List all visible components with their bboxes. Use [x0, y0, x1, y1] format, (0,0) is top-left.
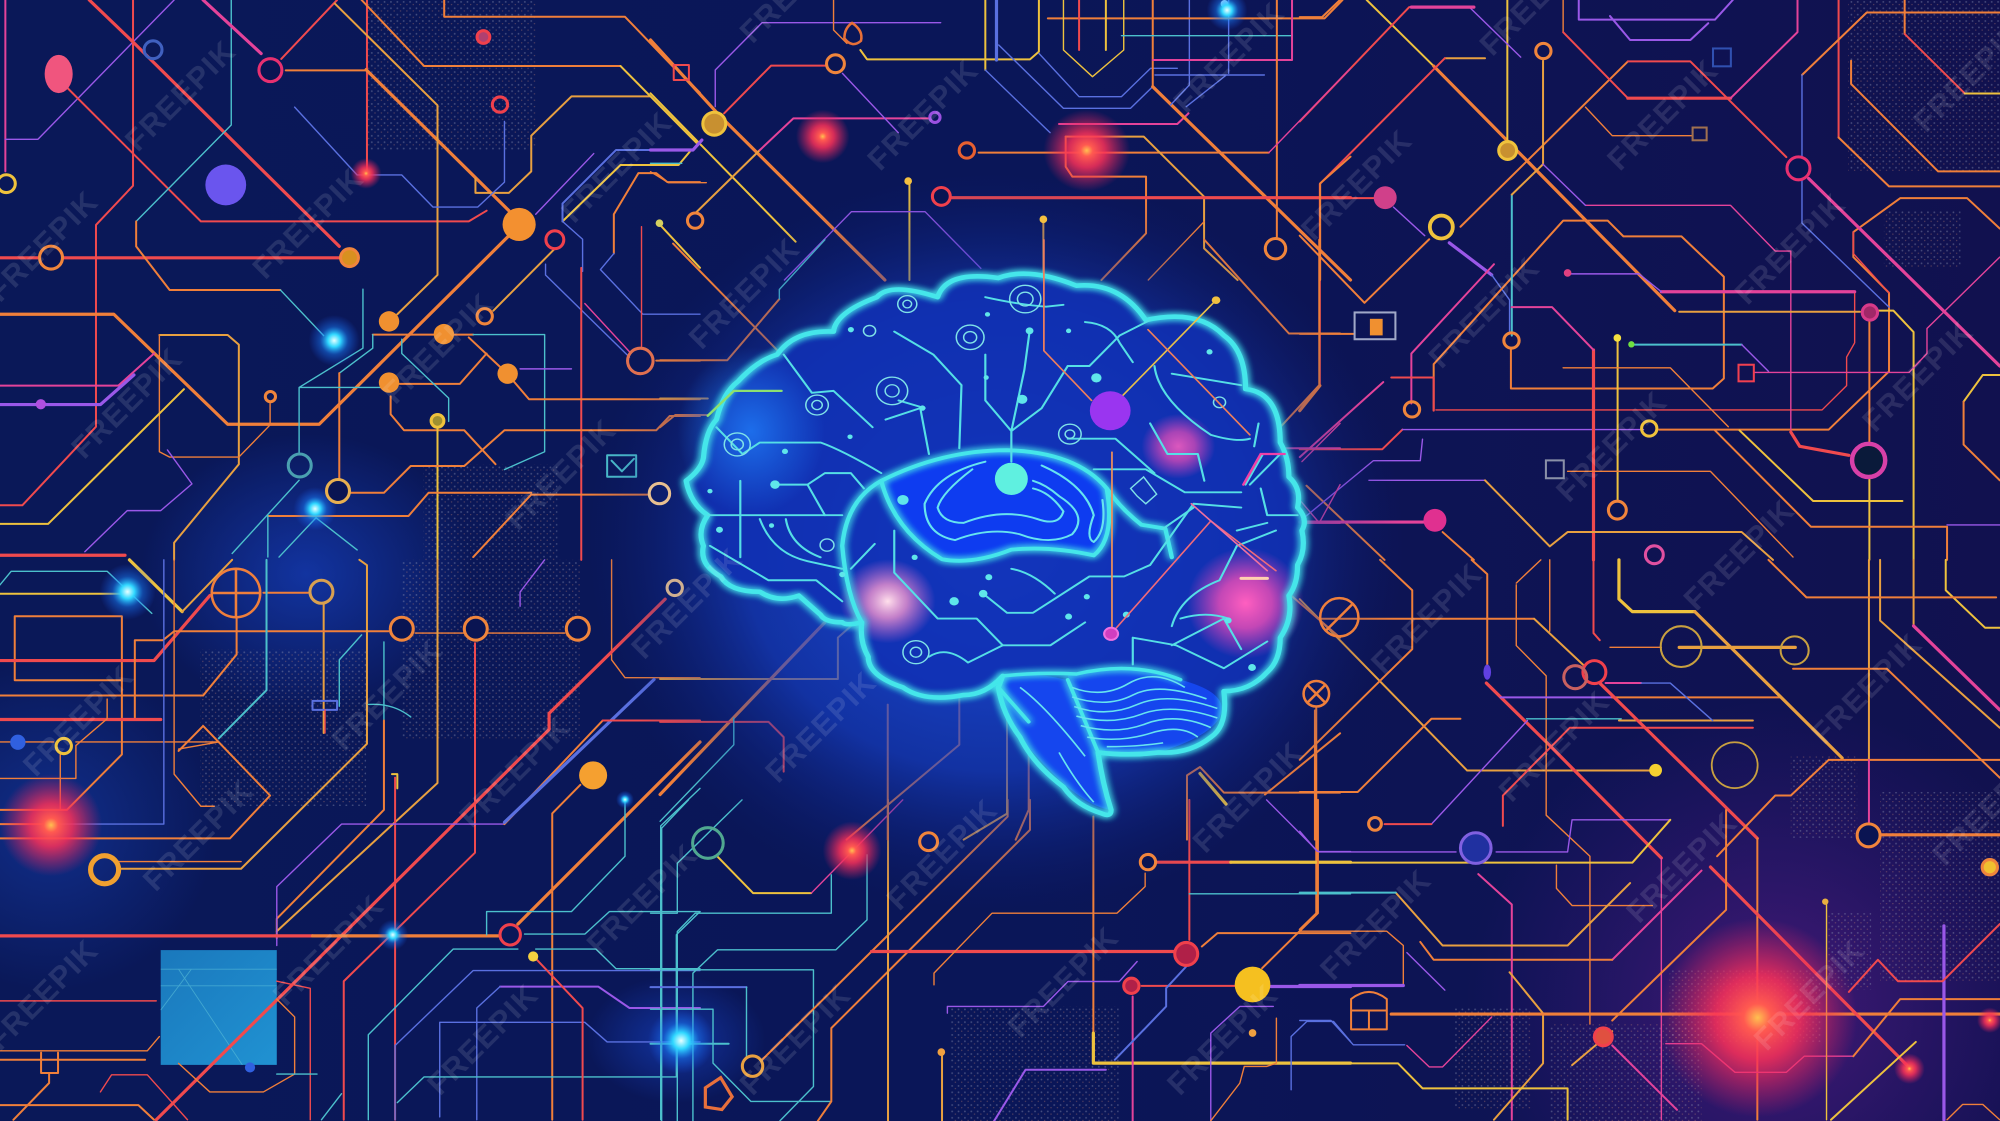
cortex fold lines — [708, 297, 1298, 668]
watermark: FREEPIK — [1492, 684, 1617, 808]
watermark: FREEPIK — [861, 53, 985, 177]
watermark: FREEPIK — [1422, 251, 1546, 375]
icon: hexagon bottom — [705, 1078, 732, 1110]
watermark: FREEPIK — [1186, 735, 1310, 859]
watermark: FREEPIK — [267, 888, 391, 1012]
icon: teardrop top — [844, 23, 861, 44]
background glows — [0, 434, 2000, 1121]
pink glow: upper right — [1141, 414, 1215, 479]
watermark: FREEPIK — [499, 413, 623, 537]
watermark: FREEPIK — [1677, 493, 1801, 617]
filled nodes — [10, 165, 1828, 1073]
watermark: FREEPIK — [625, 541, 749, 666]
watermark: FREEPIK — [376, 286, 500, 410]
watermark: FREEPIK — [1365, 557, 1489, 681]
purple node — [1090, 391, 1131, 430]
crossed circle icons — [212, 569, 1358, 707]
central brain halo — [587, 172, 1403, 912]
watermark: FREEPIK — [880, 793, 1004, 917]
circuit lines: top centre — [651, 0, 1351, 280]
watermark: FREEPIK — [421, 978, 545, 1102]
watermark: FREEPIK — [1314, 863, 1438, 987]
small square icons — [1355, 48, 1754, 478]
circuit lines: bottom-left quadrant — [0, 560, 700, 1120]
watermark: FREEPIK — [1295, 123, 1419, 247]
cerebellum folds — [1020, 677, 1217, 802]
watermark: FREEPIK — [137, 774, 261, 898]
watermark: FREEPIK — [759, 665, 883, 789]
watermark: FREEPIK — [65, 341, 189, 465]
cerebellum fill — [1068, 669, 1222, 752]
watermark: FREEPIK — [682, 232, 807, 356]
brain illustration — [677, 240, 1304, 815]
watermark: FREEPIK — [1161, 978, 1285, 1102]
watermark: FREEPIK — [325, 633, 449, 757]
circuit lines: top-right quadrant — [1300, 0, 2000, 560]
pink glow: lower left — [840, 559, 935, 643]
central node — [995, 463, 1028, 495]
lines crossing the brain — [708, 240, 1285, 634]
limbic band outline — [842, 450, 1172, 622]
brain dots — [707, 312, 1256, 671]
left lobe tint — [677, 347, 825, 515]
circuit lines: bottom-right quadrant — [1300, 560, 2000, 1120]
watermark: FREEPIK — [1747, 933, 1872, 1057]
watermark: FREEPIK — [1550, 385, 1674, 509]
circuit lines: bottom centre — [651, 800, 1351, 1121]
circuit lines around the brain — [660, 240, 1340, 840]
ring nodes: yellow and teal — [0, 41, 1657, 858]
limbic inner folds — [925, 462, 1104, 542]
yellow tip node — [1212, 296, 1220, 304]
watermark: FREEPIK — [580, 837, 705, 961]
cerebellum and stem outlines — [998, 668, 1180, 752]
watermark: FREEPIK — [453, 710, 577, 834]
brain fill — [686, 274, 1304, 815]
watermark: FREEPIK — [17, 659, 141, 783]
watermark: FREEPIK — [246, 161, 370, 286]
watermark: FREEPIK — [733, 978, 858, 1102]
watermark: FREEPIK — [1805, 627, 1929, 751]
watermark: FREEPIK — [1856, 314, 1980, 439]
magenta ring node — [1104, 628, 1118, 640]
watermark: FREEPIK — [1620, 805, 1744, 930]
watermark: FREEPIK — [555, 105, 679, 229]
circuit lines: top-left quadrant — [0, 0, 700, 560]
brain stem fill — [998, 675, 1111, 810]
watermark: FREEPIK — [1601, 53, 1725, 177]
watermark: FREEPIK — [1001, 920, 1125, 1044]
pink glow: frontal lobe — [1187, 548, 1304, 659]
brain outline — [686, 274, 1304, 815]
blue square panel — [161, 950, 277, 1065]
watermark: FREEPIK — [1728, 187, 1852, 311]
watermark: FREEPIK — [119, 34, 243, 158]
brain spirals — [724, 285, 1226, 664]
limbic band fill — [881, 450, 1109, 561]
